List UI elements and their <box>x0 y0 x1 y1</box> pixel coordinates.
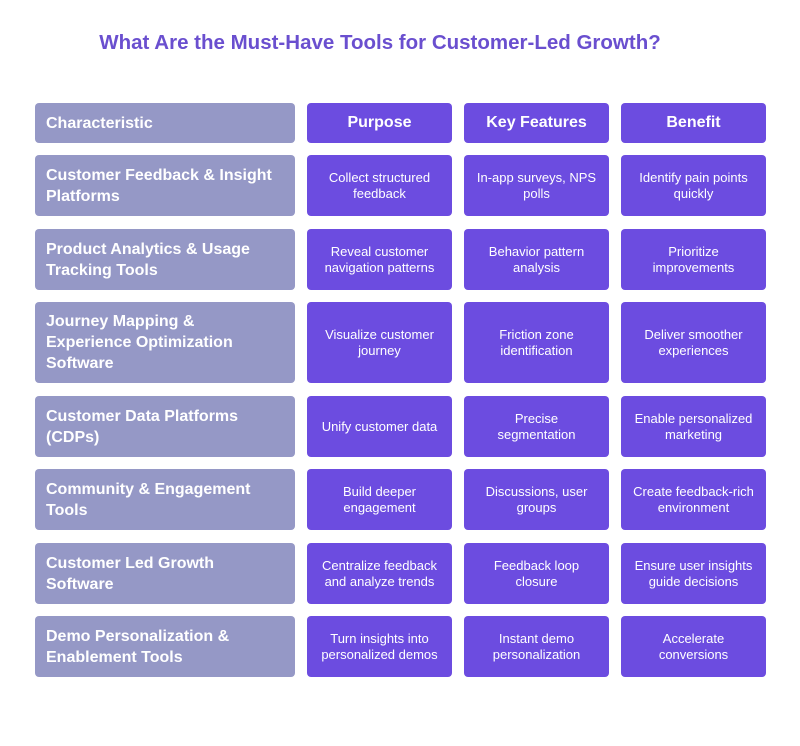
row 6: Customer Led Growth <box>46 554 214 572</box>
row 1: feedback <box>353 186 406 200</box>
row 4 <box>35 396 766 457</box>
row 6: Centralize feedback <box>322 558 437 572</box>
row 2: Prioritize <box>668 244 719 258</box>
row 5: groups <box>517 500 556 514</box>
row 1: quickly <box>674 186 713 200</box>
row 5: Create feedback-rich <box>633 484 754 498</box>
row 5: engagement <box>343 500 416 514</box>
row 2: navigation patterns <box>325 260 434 274</box>
row 6: closure <box>516 574 557 588</box>
row 1: In-app surveys, NPS <box>477 170 596 184</box>
row 2: Reveal customer <box>331 244 428 258</box>
row 7: Turn insights into <box>330 630 429 646</box>
row 1: Identify pain points <box>639 170 748 184</box>
row 7: Demo Personalization & <box>46 628 229 644</box>
row 2 <box>35 229 766 290</box>
row 3: Software <box>46 355 114 372</box>
row 2: Tracking Tools <box>46 262 158 278</box>
row 6: guide decisions <box>649 574 738 588</box>
row 7: Instant demo <box>499 630 574 646</box>
row 3: Journey Mapping & <box>46 313 194 330</box>
row 5: Build deeper <box>343 484 416 498</box>
row 7: Accelerate <box>663 630 724 646</box>
row 2: improvements <box>653 260 734 274</box>
row 7: conversions <box>659 646 728 662</box>
row 6: Ensure user insights <box>635 558 752 572</box>
row 1 <box>35 155 766 216</box>
row 5: Discussions, user <box>486 484 587 498</box>
row 3: journey <box>358 342 401 358</box>
row 5: Tools <box>46 502 87 518</box>
row 2: analysis <box>513 260 560 274</box>
row 6: and analyze trends <box>325 574 434 588</box>
row 3 <box>35 302 766 383</box>
row 7: Enablement Tools <box>46 648 183 666</box>
row 1: Collect structured <box>329 170 430 184</box>
row 5: environment <box>658 500 729 514</box>
row 1: Platforms <box>46 188 120 204</box>
row 4: Precise <box>515 410 558 426</box>
row 4: Enable personalized <box>635 410 752 426</box>
header row: Key Features <box>486 114 587 131</box>
row 4: Customer Data Platforms <box>46 408 238 424</box>
row 4: (CDPs) <box>46 428 99 446</box>
row 3: experiences <box>658 342 729 358</box>
row 5 <box>35 469 766 530</box>
row 2: Behavior pattern <box>489 244 584 258</box>
row 4: segmentation <box>497 426 576 442</box>
row 3: Friction zone <box>499 326 574 342</box>
header row <box>35 103 766 143</box>
row 7: personalization <box>493 646 580 662</box>
row 6 <box>35 543 766 604</box>
row 3: identification <box>500 342 573 358</box>
header row: Characteristic <box>46 114 153 132</box>
row 6: Software <box>46 576 114 592</box>
header row: Purpose <box>347 114 412 131</box>
title: What Are the Must-Have Tools for Customer-Led Growth? <box>99 31 661 54</box>
row 5: Community & Engagement <box>46 480 250 498</box>
row 7 <box>35 616 766 677</box>
row 2: Product Analytics & Usage <box>46 240 250 258</box>
row 3: Visualize customer <box>325 326 434 342</box>
row 4: Unify customer data <box>322 418 437 434</box>
header row: Benefit <box>666 114 721 131</box>
row 3: Deliver smoother <box>644 326 743 342</box>
row 4: marketing <box>665 426 722 442</box>
row 3: Experience Optimization <box>46 334 233 351</box>
row 7: personalized demos <box>321 646 438 662</box>
row 1: polls <box>523 186 550 200</box>
row 6: Feedback loop <box>494 558 579 572</box>
row 1: Customer Feedback & Insight <box>46 166 272 184</box>
